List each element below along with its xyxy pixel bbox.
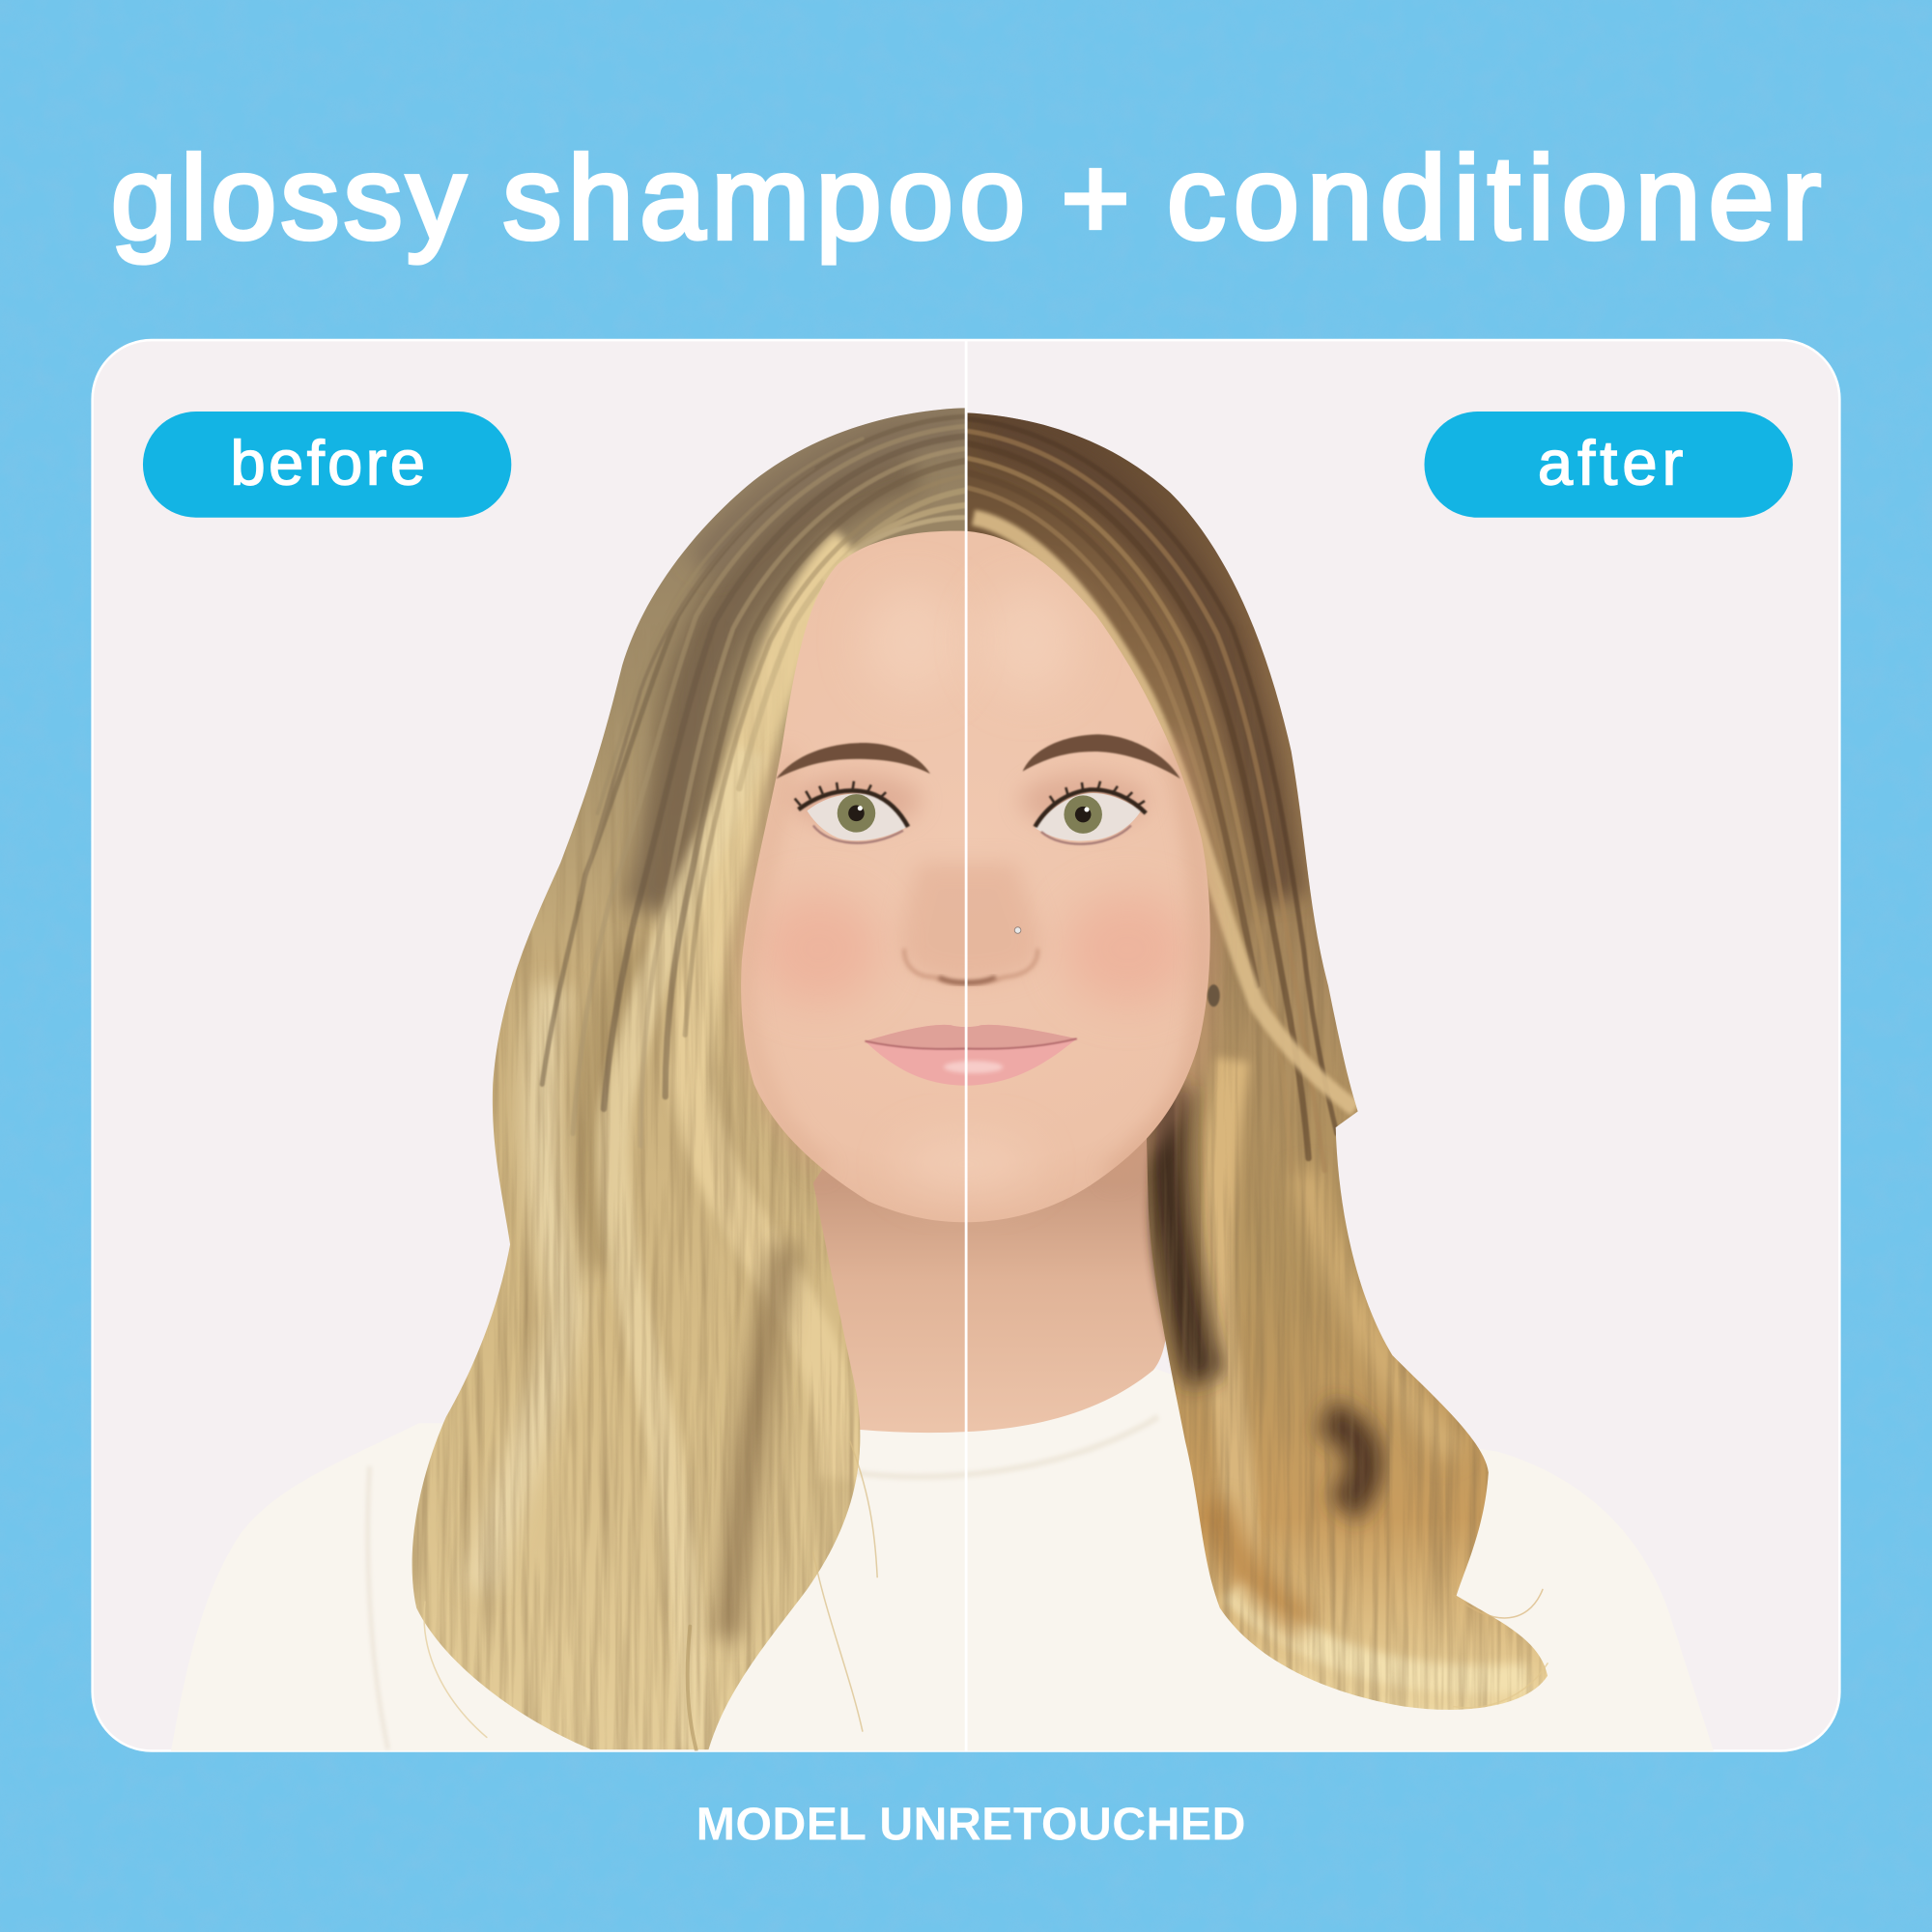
hair: after side (961, 401, 1565, 1725)
blonde face frame (974, 518, 1355, 1109)
flowing strands (542, 416, 966, 1146)
pill: before (143, 412, 511, 518)
icon: nose stud (1014, 927, 1021, 933)
eye socket shading (792, 774, 1149, 828)
nose (901, 863, 1039, 983)
white shirt (171, 1414, 1714, 1750)
lips (865, 1025, 1077, 1086)
panel: before and after portrait (93, 340, 1839, 1756)
face skin (741, 531, 1210, 1222)
caption: MODEL UNRETOUCHED (696, 1798, 1246, 1850)
side face shadow (743, 752, 826, 1171)
title (111, 131, 1821, 264)
eye: after side (1035, 781, 1146, 844)
pill: after: after (1538, 427, 1683, 497)
dark root band (653, 458, 912, 912)
pill: before: before (231, 427, 425, 497)
hair: before side (394, 401, 974, 1756)
pill: after (1424, 412, 1793, 518)
title: conditioner (1167, 131, 1821, 264)
title: + (1061, 131, 1130, 264)
shadow behind neck on after side (1144, 1156, 1167, 1350)
flowing strands (969, 419, 1337, 1171)
portrait: split face comparison (170, 401, 1716, 1756)
cheek blush and highlights (757, 585, 1191, 1191)
blonde face frame (690, 547, 850, 1479)
neck (813, 1138, 1165, 1434)
icon: earring (1208, 984, 1220, 1007)
title: glossy (111, 131, 466, 264)
stray hair strands (424, 1441, 1548, 1749)
eye: before side (795, 781, 908, 843)
title: shampoo (502, 131, 1025, 264)
eyebrows (777, 734, 1180, 779)
centre divider (965, 340, 968, 1751)
